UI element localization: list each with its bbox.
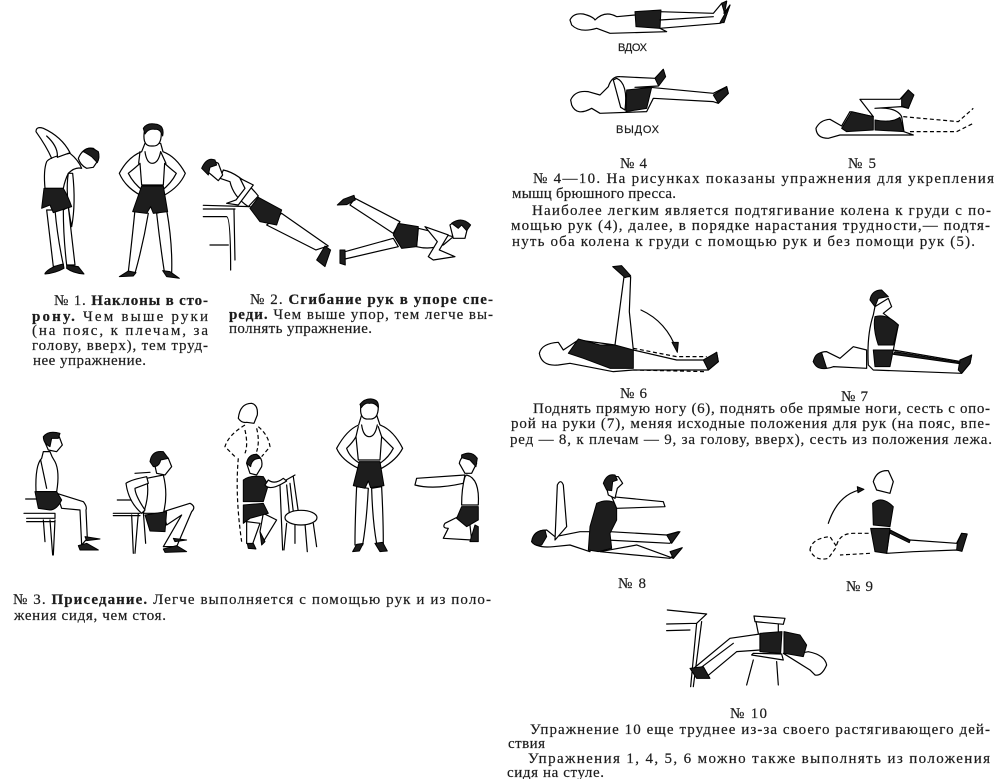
illustrations for exercise 3 bbox=[24, 399, 478, 555]
label: figure 10: № 10 bbox=[730, 706, 767, 722]
figure: assisted squat at chair bbox=[225, 403, 317, 552]
figure: push-up at table bbox=[202, 159, 331, 270]
figure: back bend over chair bbox=[667, 610, 827, 687]
label: figure 9: № 9 bbox=[846, 579, 873, 595]
label: inhale: ВДОХ bbox=[618, 42, 648, 54]
figure: side bend bbox=[36, 128, 99, 274]
label: figure 6: № 6 bbox=[620, 386, 648, 402]
caption: exercise 2: № 2. Сгибание рук в упоре спе- bbox=[250, 292, 493, 308]
text block: exercises 6-9: Поднять прямую ногу (6), поднять обе прямые ноги, сесть с опо- bbox=[533, 401, 990, 417]
caption: exercise 1 bbox=[32, 293, 208, 369]
illustrations for exercises 4 and 5 bbox=[570, 1, 973, 138]
illustrations for exercises 8, 9 and 10 bbox=[532, 471, 967, 687]
illustrations for exercises 6 and 7 bbox=[539, 266, 972, 373]
figure: push-up on floor with raised leg bbox=[337, 195, 471, 265]
text block: exercises 6-9: рой на руки (7), меняя исходные положения для рук (на пояс, впе- bbox=[511, 416, 990, 432]
figure: standing hands on hips bbox=[119, 124, 185, 278]
figure: lying, exhale with knee to chest bbox=[571, 69, 728, 113]
arrow: rising from lying bbox=[828, 487, 864, 523]
figure: sit-up with arm forward bbox=[532, 475, 682, 558]
text block: exercise 10 notes: Упражнения 1, 4, 5, 6 можно также выполнять из положения bbox=[528, 751, 990, 767]
figure: squat with hand support bbox=[113, 451, 194, 553]
caption: exercise 1: голову, вверх), тем труд- bbox=[32, 338, 208, 354]
text block: exercise 10 notes bbox=[507, 722, 990, 779]
illustrations for exercises 1 and 2 bbox=[36, 124, 471, 278]
figure: kneeling with arms forward bbox=[415, 453, 478, 542]
caption: exercise 1: № 1. Наклоны в сто- bbox=[54, 293, 208, 309]
arrow: leg lowering bbox=[641, 310, 678, 352]
caption: exercise 1: нее упражнение. bbox=[33, 353, 146, 369]
figure: both knees to chest bbox=[816, 90, 973, 138]
caption: exercise 2: полнять упражнение. bbox=[229, 321, 372, 337]
figure: seated on table bbox=[24, 432, 100, 555]
text block: exercises 4-10 intro: мощью рук (4), далее, в порядке нарастания трудности,— подтя- bbox=[511, 218, 990, 234]
text block: exercises 6-9: ред — 8, к плечам — 9, за голову, вверх), сесть из положения лежа. bbox=[510, 432, 992, 448]
label: figure 8: № 8 bbox=[618, 576, 646, 592]
label: exhale: ВЫДОХ bbox=[616, 124, 660, 136]
label: figure 4: № 4 bbox=[620, 156, 648, 172]
text block: exercises 4-10 intro: мышц брюшного пресса. bbox=[512, 186, 676, 202]
caption: exercise 3: жения сидя, чем стоя. bbox=[13, 608, 166, 624]
label: figure 7: № 7 bbox=[841, 389, 868, 405]
caption: exercise 3: № 3. Приседание. Легче выполняется с помощью рук и из поло- bbox=[13, 592, 491, 608]
figure: sitting up with arm support bbox=[813, 290, 972, 373]
text block: exercise 10 notes: Упражнение 10 еще труднее из-за своего растягивающего дей- bbox=[530, 722, 990, 738]
label: figure 5: № 5 bbox=[848, 156, 876, 172]
figure: standing hands on hips bbox=[337, 399, 403, 552]
text block: exercises 6-9 bbox=[510, 401, 992, 448]
caption: exercise 3 bbox=[13, 592, 491, 624]
text block: exercises 4-10 intro bbox=[511, 171, 994, 250]
text block: exercises 4-10 intro: нуть оба колена к груди с помощью рук и без помощи рук (5). bbox=[512, 234, 975, 250]
figure: sit-up from lying, dashed start pose bbox=[810, 471, 967, 559]
figure: raised straight leg bbox=[539, 266, 718, 372]
caption: exercise 1: (на пояс, к плечам, за bbox=[32, 323, 208, 339]
caption: exercise 2: реди. Чем выше упор, тем легче вы- bbox=[229, 307, 493, 323]
caption: exercise 1: рону. Чем выше руки bbox=[32, 309, 208, 325]
text block: exercises 4-10 intro: № 4—10. На рисунках показаны упражнения для укрепления bbox=[533, 171, 994, 187]
text block: exercises 4-10 intro: Наиболее легким является подтягивание колена к груди с по- bbox=[532, 203, 991, 219]
figure: lying, inhale bbox=[570, 1, 730, 33]
caption: exercise 2 bbox=[229, 292, 493, 337]
text block: exercise 10 notes: ствия bbox=[508, 736, 545, 752]
